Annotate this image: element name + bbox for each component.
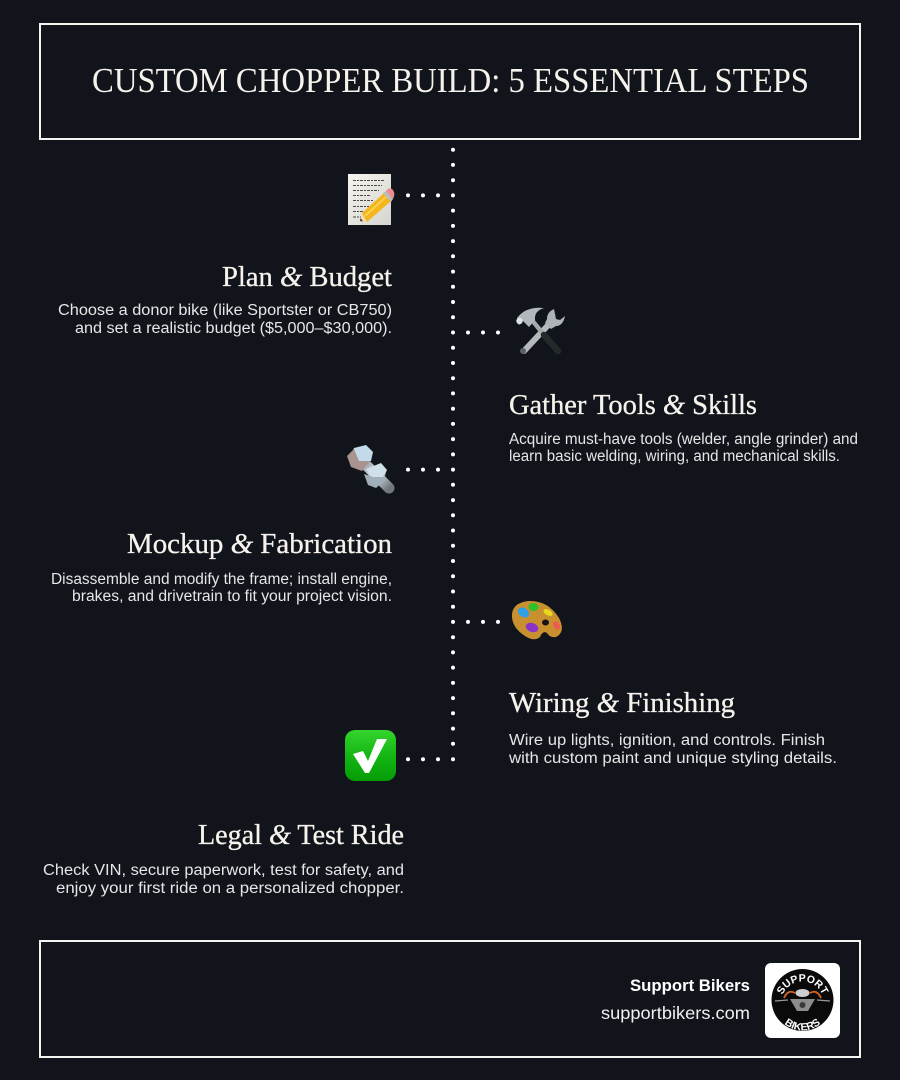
icon: hammer and wrench xyxy=(516,308,565,354)
heading: Plan & Budget: Plan & Budget xyxy=(222,262,392,293)
connector dots 2 xyxy=(466,330,500,334)
description: Legal & Test Ride: enjoy your first ride on a personalized chopper. xyxy=(56,880,404,897)
brand url: supportbikers.com xyxy=(601,1003,750,1023)
heading: Mockup & Fabrication: Mockup & Fabrication xyxy=(127,529,392,560)
icon: memo and pencil xyxy=(348,174,394,225)
step 5: legal and test ride xyxy=(43,730,440,897)
description: Legal & Test Ride xyxy=(43,862,404,897)
icon: artist palette xyxy=(512,601,562,639)
logo xyxy=(765,963,840,1038)
footer box xyxy=(39,940,861,1058)
step 4: wiring and finishing xyxy=(466,601,837,767)
title: CUSTOM CHOPPER BUILD: 5 ESSENTIAL STEPS xyxy=(92,61,809,100)
description: Gather Tools & Skills: Acquire must-have tools (welder, angle grinder) and xyxy=(509,431,858,448)
description: Plan & Budget: and set a realistic budget ($5,000–$30,000). xyxy=(75,320,392,337)
logo: SUPPORT xyxy=(777,974,829,994)
icon: nut and bolt xyxy=(347,445,389,488)
heading: Wiring & Finishing: Wiring & Finishing xyxy=(509,688,735,719)
heading: Legal & Test Ride: Legal & Test Ride xyxy=(198,820,404,851)
step 1: plan and budget xyxy=(58,174,440,337)
description: Wiring & Finishing xyxy=(508,732,837,767)
icon: green check mark xyxy=(345,730,396,781)
description: Wiring & Finishing: Wire up lights, ignition, and controls. Finish xyxy=(509,732,825,749)
description: Mockup & Fabrication xyxy=(51,571,392,605)
connector dots 4 xyxy=(466,620,500,624)
title box xyxy=(40,24,860,139)
description: Plan & Budget xyxy=(58,302,392,337)
description: Mockup & Fabrication: brakes, and drivetrain to fit your project vision. xyxy=(72,588,392,605)
description: Legal & Test Ride: Check VIN, secure paperwork, test for safety, and xyxy=(43,862,404,879)
connector dots 3 xyxy=(406,468,440,472)
description: Mockup & Fabrication: Disassemble and modify the frame; install engine, xyxy=(51,571,392,588)
timeline dotted spine xyxy=(451,148,455,761)
step 3: mockup and fabrication xyxy=(51,445,440,605)
heading: Gather Tools & Skills: Gather Tools & Skills xyxy=(509,390,757,421)
description: Gather Tools & Skills xyxy=(509,431,858,465)
connector dots 5 xyxy=(406,757,440,761)
description: Gather Tools & Skills: learn basic welding, wiring, and mechanical skills. xyxy=(509,448,840,465)
description: Wiring & Finishing: with custom paint and unique styling details. xyxy=(508,750,837,767)
logo: BIKERS xyxy=(784,1018,820,1031)
connector dots 1 xyxy=(406,193,440,197)
step 2: gather tools and skills xyxy=(466,308,858,465)
description: Plan & Budget: Choose a donor bike (like Sportster or CB750) xyxy=(58,302,392,319)
brand name: Support Bikers xyxy=(630,977,750,995)
